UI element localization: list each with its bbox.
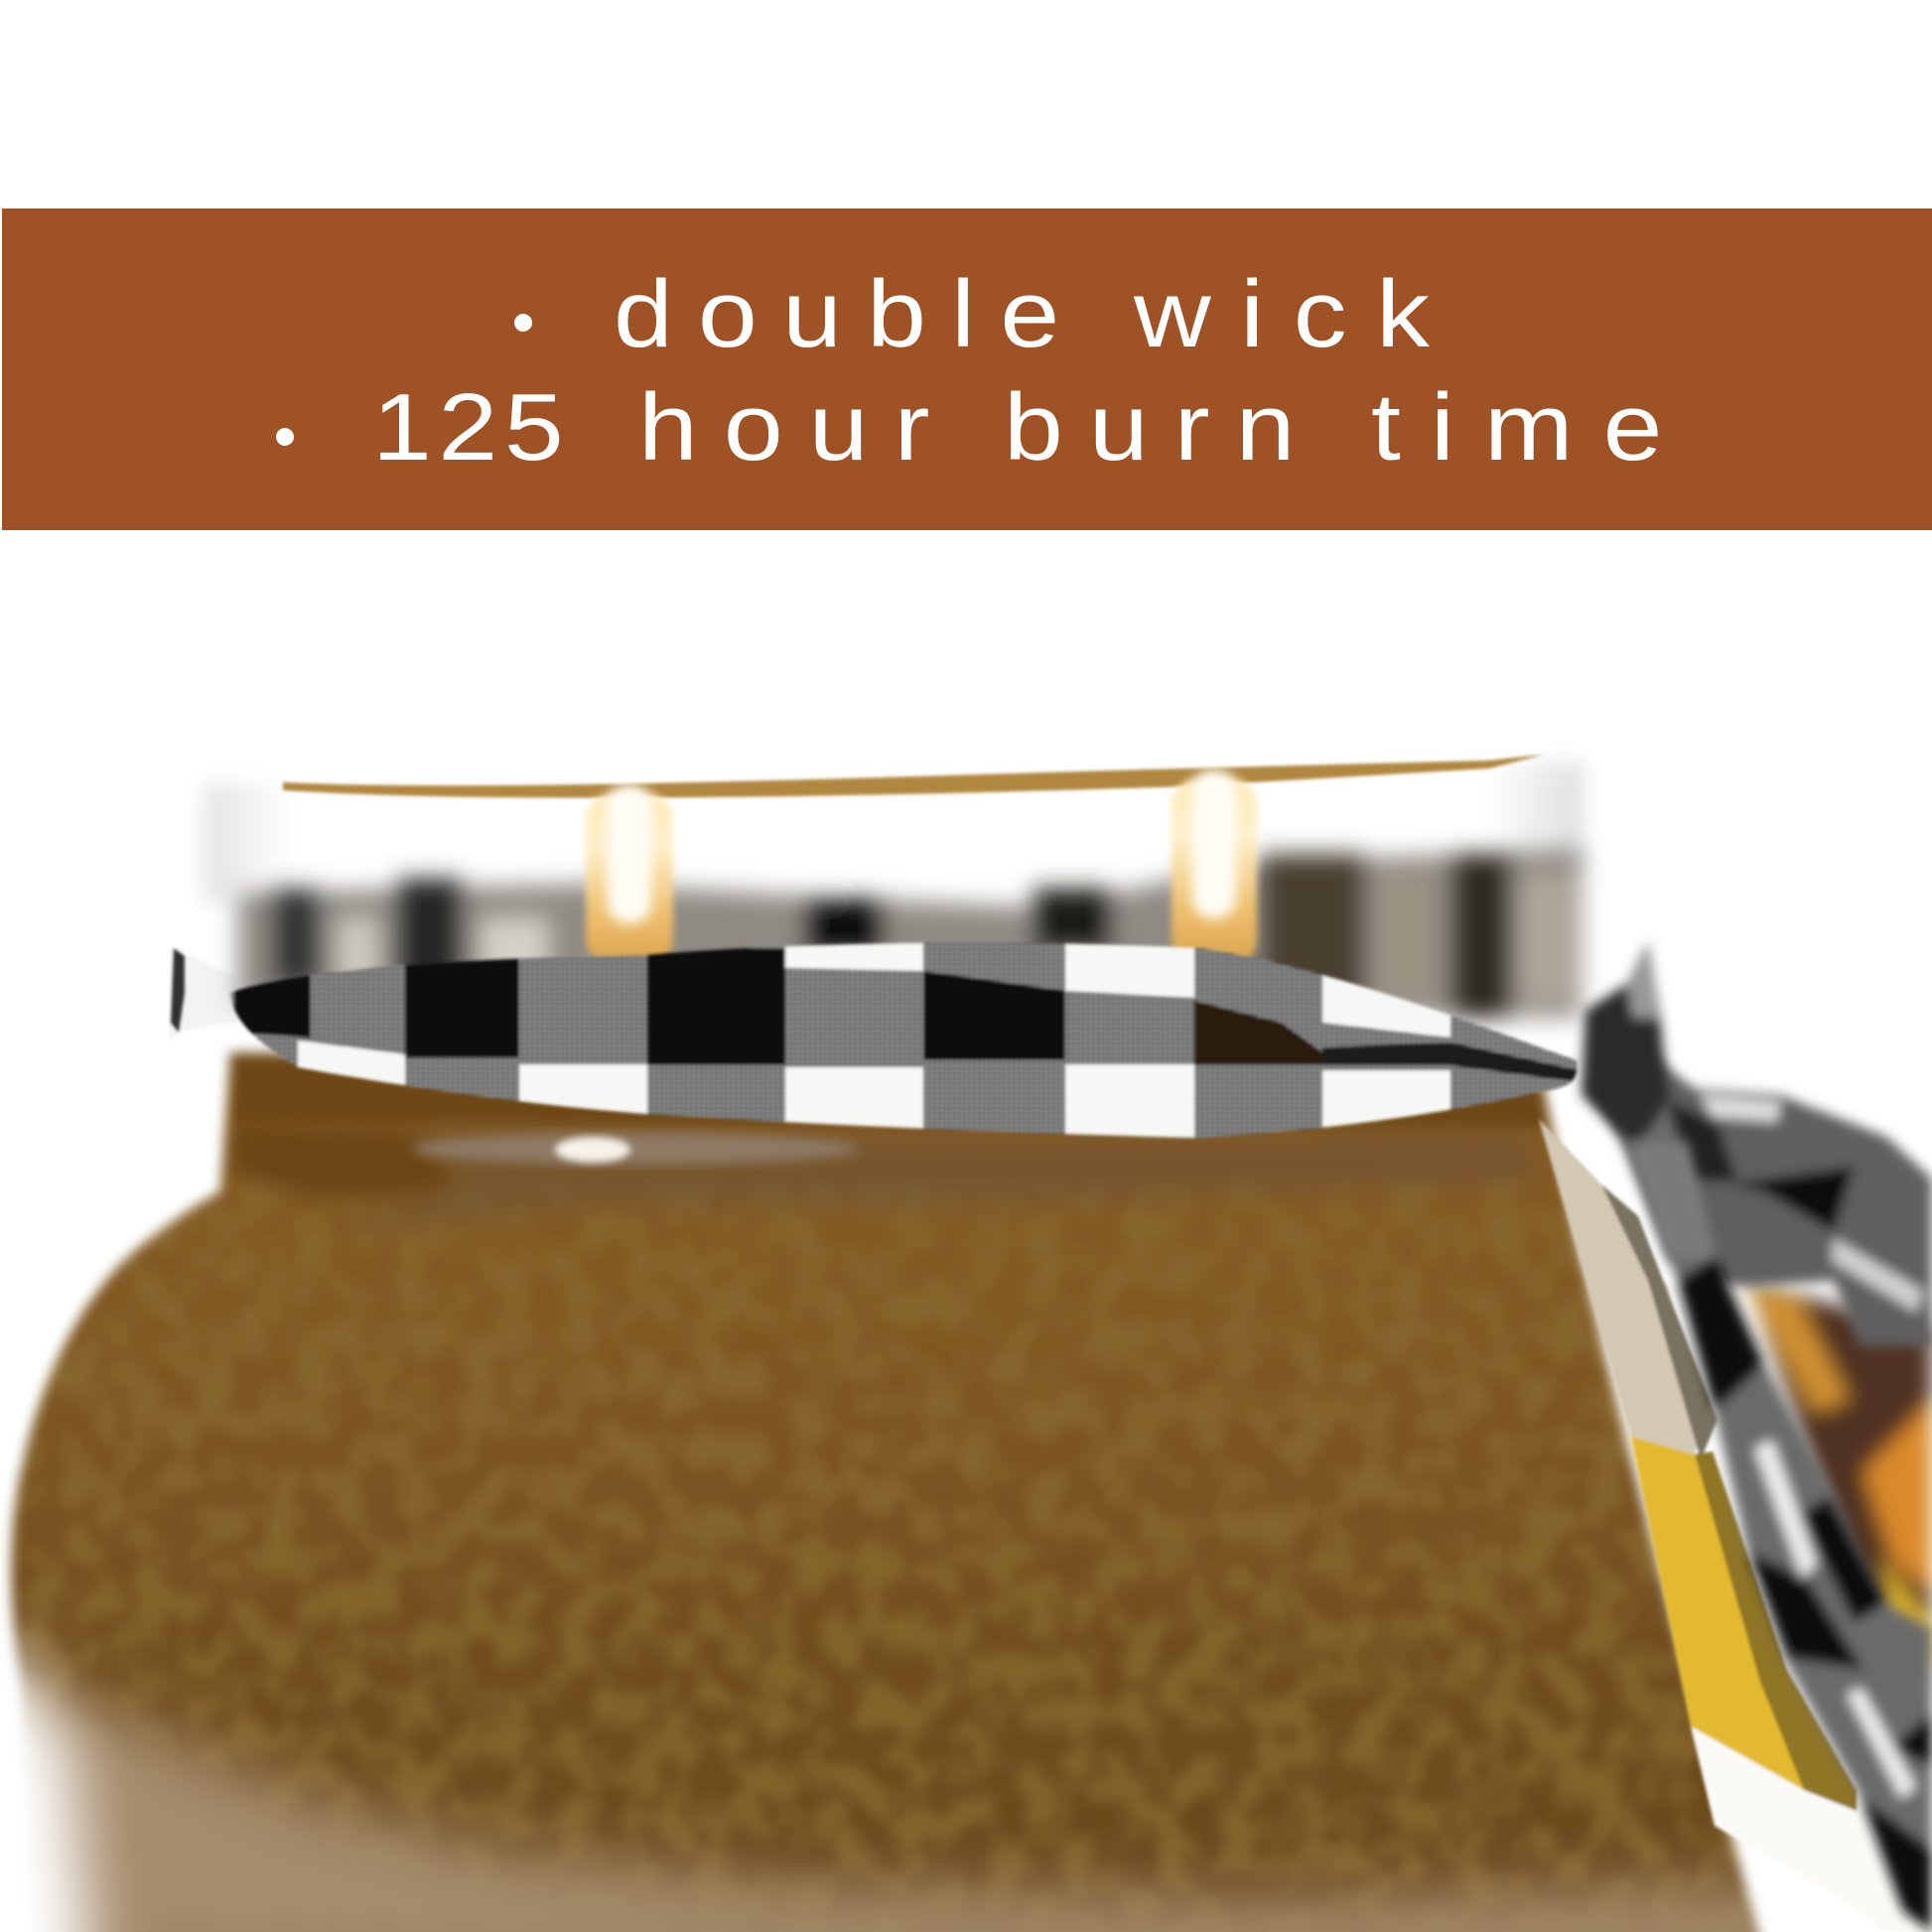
text: 125 hour burn time: burn — [1004, 373, 1295, 481]
banner: features — [2, 208, 1932, 530]
text: double wick: double — [614, 260, 1059, 367]
tag: yellow panel — [1631, 1437, 1804, 1790]
jar body — [0, 1052, 1787, 1932]
flame: right wick — [1172, 769, 1257, 965]
text: double wick — [511, 260, 1431, 367]
black checks — [234, 948, 1065, 1065]
tag: beige top — [1539, 1119, 1701, 1454]
ribbon knot — [1582, 943, 1715, 1261]
text: 125 hour burn time: • — [273, 399, 297, 473]
ribbon gingham band — [218, 933, 1588, 1152]
text: 125 hour burn time: 125 — [372, 373, 564, 481]
tail white checks — [1754, 1440, 1817, 1579]
ribbon left end — [169, 948, 238, 1040]
text: 125 hour burn time: time — [1371, 373, 1662, 481]
text: double wick: wick — [1133, 260, 1431, 367]
dark fold — [1322, 1042, 1579, 1082]
flame: left wick — [586, 784, 673, 965]
ribbon tail — [1588, 1082, 1932, 1932]
lower fade — [0, 1688, 1787, 1932]
mottled wax texture — [0, 1181, 1787, 1932]
dark brown check — [1194, 1001, 1322, 1065]
glass highlight on neck — [412, 1133, 859, 1165]
photo on tag — [1747, 1281, 1932, 1678]
candle jar photo — [0, 755, 1932, 1932]
neck shading — [230, 1052, 1549, 1127]
tag: olive fold — [1695, 1451, 1857, 1811]
text: 125 hour burn time: hour — [638, 373, 929, 481]
ribbon bow loop — [1628, 1052, 1932, 1346]
white checks — [298, 938, 1450, 1144]
tag: white lower — [1691, 1726, 1932, 1932]
jar glass top — [204, 755, 1584, 1018]
text: double wick: • — [511, 285, 535, 358]
text: 125 hour burn time — [273, 373, 1662, 481]
tag: inner layer — [1601, 1184, 1718, 1459]
gold rim — [283, 755, 1544, 798]
glass band under neck — [403, 1136, 1529, 1215]
blurred ribbon reflection — [238, 849, 1581, 1018]
tail black checks — [1678, 1256, 1764, 1412]
gift card tag — [1539, 1119, 1932, 1932]
left edge fade — [0, 1628, 94, 1932]
flames — [586, 769, 1257, 965]
